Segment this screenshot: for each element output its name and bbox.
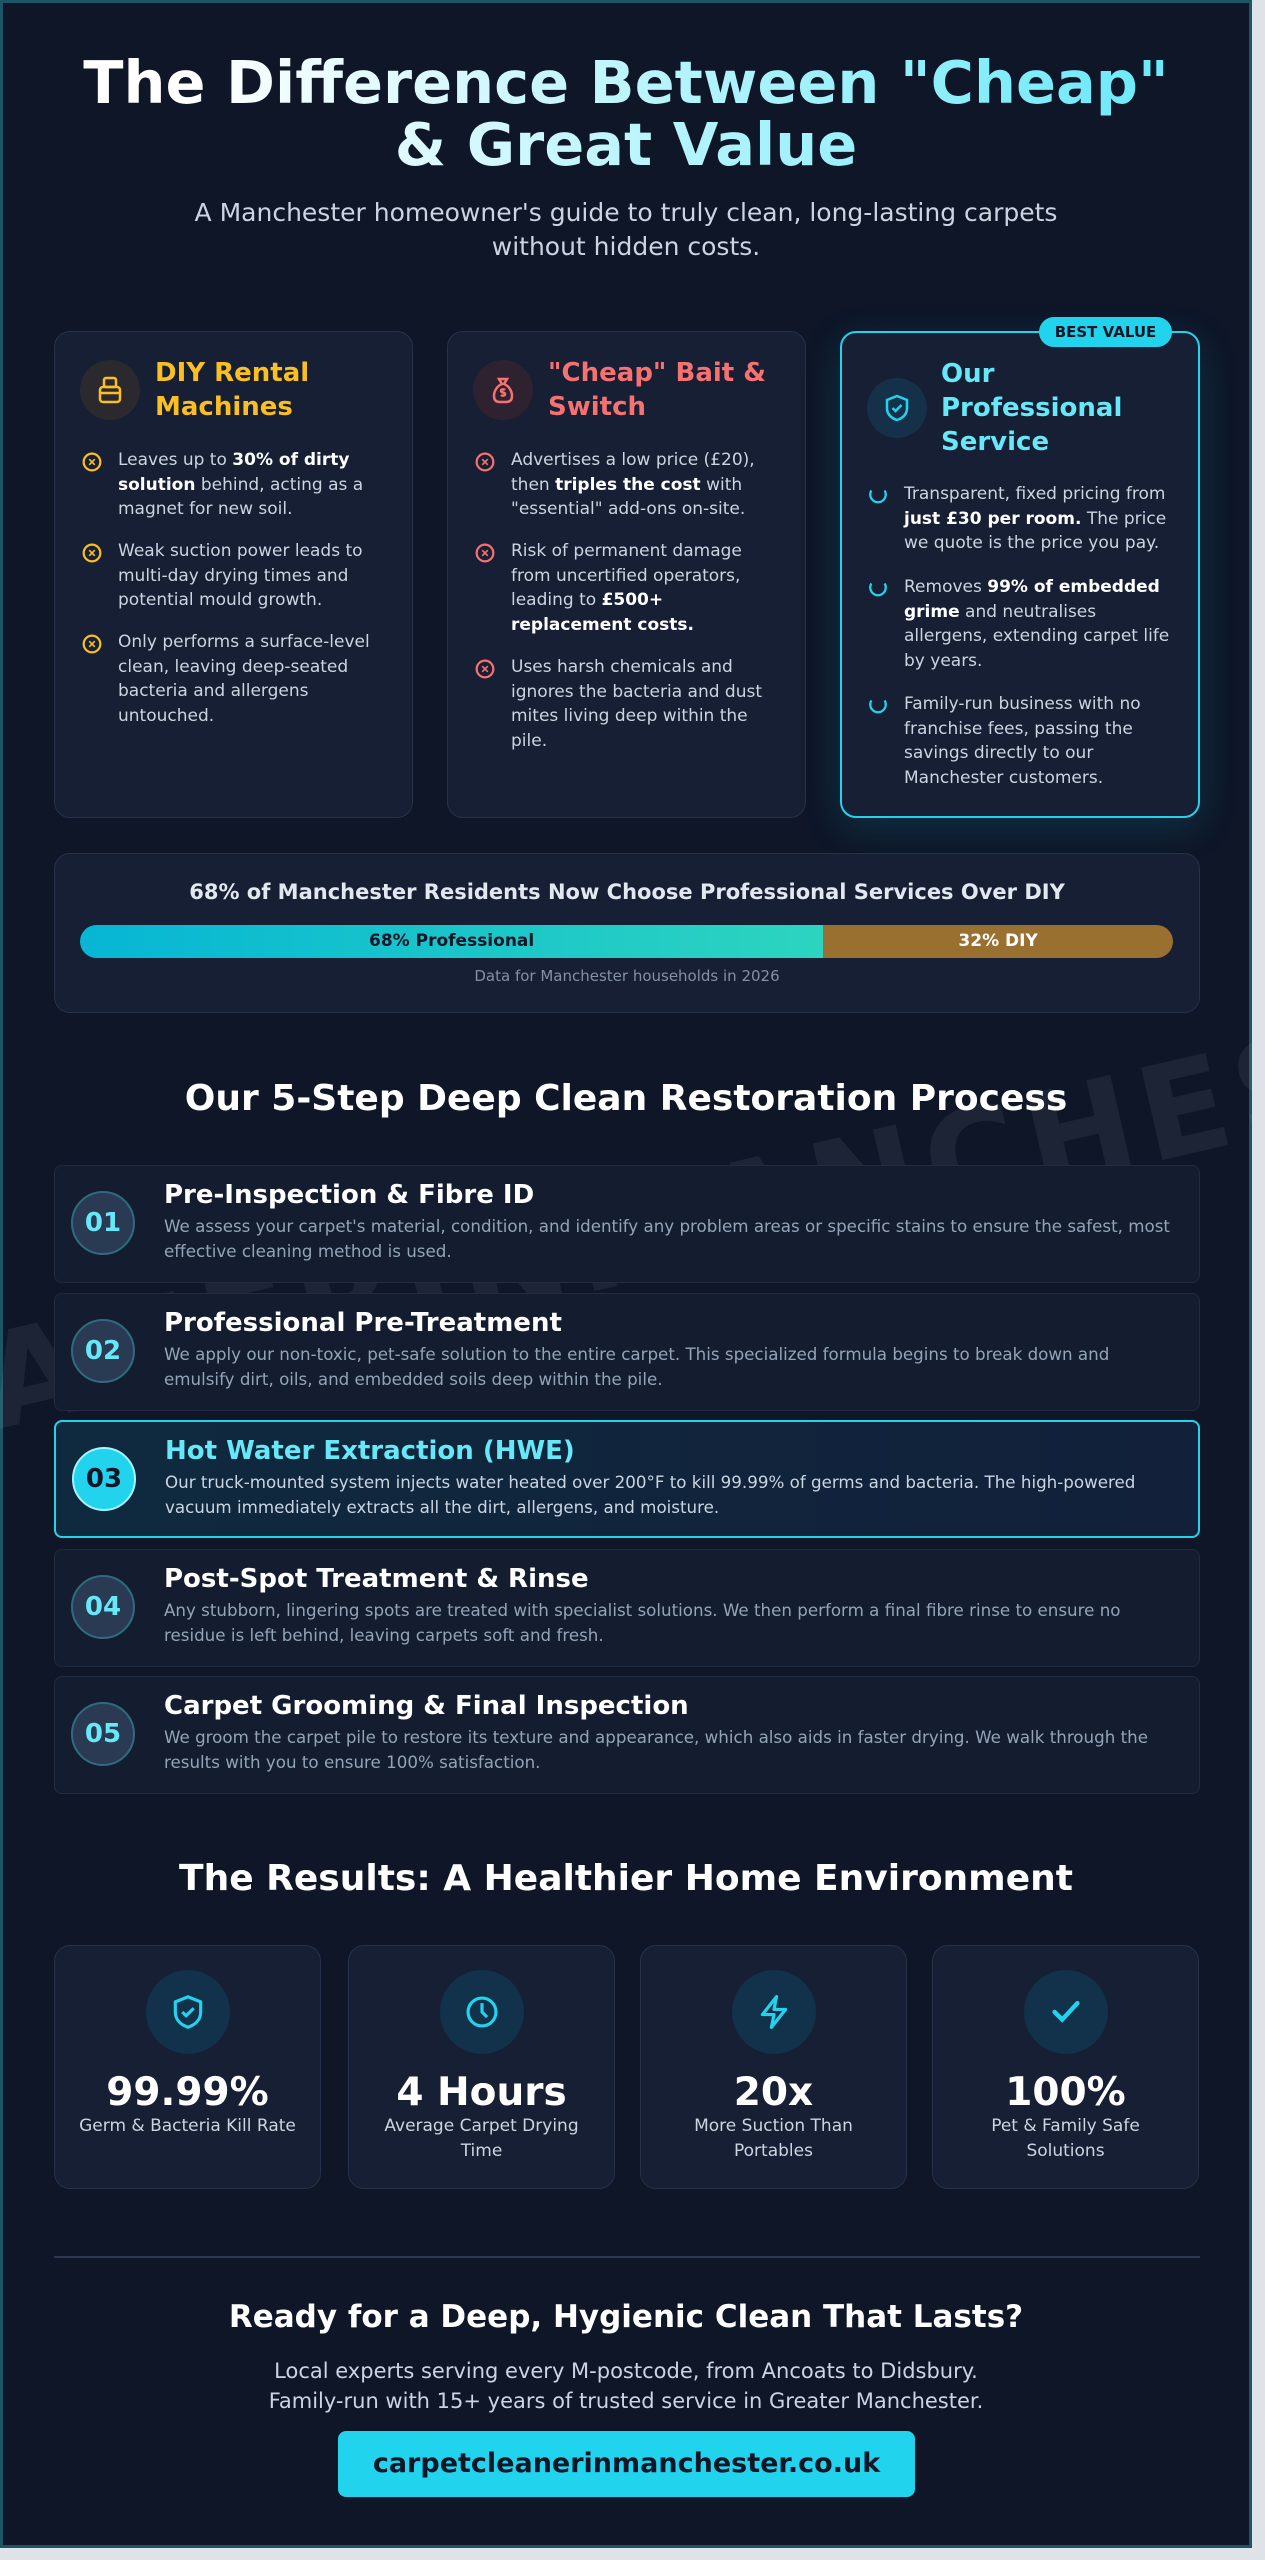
bullet list: Advertises a low price (£20), then triples the cost with "essential" add-ons on-site. (511, 450, 755, 519)
result: kill rate: Germ & Bacteria Kill Rate (79, 2116, 296, 2136)
stat heading: 68% of Manchester Residents Now Choose Professional Services Over DIY (189, 880, 1065, 904)
step 05 (54, 1676, 1200, 1794)
CTA button (338, 2431, 915, 2497)
result: drying time: Average Carpet Drying Time (384, 2116, 579, 2161)
bar chart (80, 925, 1173, 958)
step 02 (54, 1293, 1200, 1411)
panel: stats bar (54, 853, 1200, 1013)
subtitle: A Manchester homeowner's guide to truly clean, long-lasting carpets (195, 198, 1057, 227)
result: safe: 100% (1005, 2070, 1126, 2115)
result: kill rate (54, 1945, 321, 2189)
step 05: We groom the carpet pile to restore its texture and appearance, which also aids in faster drying. We walk through the results with you to ensure 100% satisfaction. (164, 1727, 1148, 1772)
step 01: 01 (85, 1208, 121, 1238)
CTA text (269, 2359, 983, 2413)
heading: Switch (548, 392, 646, 422)
step 02: 02 (85, 1336, 121, 1366)
badge: best value (1039, 317, 1172, 347)
step 04: Post-Spot Treatment & Rinse (164, 1564, 589, 1594)
heading (548, 358, 766, 422)
step 01: We assess your carpet's material, condition, and identify any problem areas or specific stains to ensure the safest, most effective cleaning method is used. (164, 1216, 1170, 1261)
title (0, 52, 1252, 176)
icon: shield (867, 378, 927, 438)
heading: Machines (155, 392, 293, 422)
CTA text: Local experts serving every M-postcode, from Ancoats to Didsbury. (274, 2359, 978, 2383)
heading: "Cheap" Bait & (548, 358, 766, 388)
step 04: residue is left behind, leaving carpets soft and fresh. (164, 1625, 604, 1645)
subtitle (194, 198, 1057, 261)
title: & Great Value (395, 110, 857, 179)
CTA button: carpetcleanerinmanchester.co.uk (373, 2448, 880, 2479)
result: suction (640, 1945, 907, 2189)
panel: our professional service: Family-run business with no franchise fees, passing the savings directly to our Manchester customers. (904, 694, 1141, 788)
result: suction: 20x (734, 2070, 813, 2115)
caption: Data for Manchester households in 2026 (474, 967, 780, 985)
icon: money bag (473, 360, 533, 420)
result: safe: Pet & Family Safe Solutions (991, 2116, 1140, 2161)
step 04 (54, 1549, 1200, 1667)
step 05: 05 (85, 1719, 121, 1749)
section heading: process: Our 5-Step Deep Clean Restoration Process (185, 1078, 1067, 1119)
panel: DIY rental machines (54, 331, 413, 818)
result: drying time (348, 1945, 615, 2189)
heading (155, 358, 309, 422)
panel: cheap bait and switch (447, 331, 806, 818)
CTA text: Family-run with 15+ years of trusted service in Greater Manchester. (269, 2389, 983, 2413)
panel: DIY rental machines: Weak suction power leads to multi-day drying times and potential mould growth. (118, 541, 363, 610)
heading (941, 359, 1122, 457)
result: safe (932, 1945, 1199, 2189)
bar chart: 68% Professional (369, 931, 534, 951)
subtitle: without hidden costs. (492, 232, 760, 261)
result: drying time: 4 Hours (396, 2070, 567, 2115)
step 05: Carpet Grooming & Final Inspection (164, 1691, 689, 1721)
result: suction: More Suction Than Portables (694, 2116, 853, 2161)
step 01 (54, 1165, 1200, 1283)
heading: Service (941, 427, 1049, 457)
step 03 highlighted (54, 1420, 1200, 1538)
step 02: Professional Pre-Treatment (164, 1308, 562, 1338)
panel: cheap bait and switch: Uses harsh chemicals and ignores the bacteria and dust mites living deep within the pile. (511, 657, 762, 750)
heading: Our (941, 359, 994, 389)
panel: our professional service: Removes 99% of embedded grime and neutralises allergens, extending carpet life by years. (904, 577, 1169, 670)
step 03 highlighted: Our truck-mounted system injects water heated over 200°F to kill 99.99% of germs and bacteria. The high-powered vacuum immediately extracts all the dirt, allergens, and moisture. (165, 1472, 1135, 1517)
bullet list: Transparent, fixed pricing from just £30 per room. The price we quote is the price you pay. (904, 484, 1166, 553)
step 04: Any stubborn, lingering spots are treated with specialist solutions. We then perform a final fibre rinse to ensure no (164, 1600, 1120, 1620)
step 01: Pre-Inspection & Fibre ID (164, 1180, 534, 1210)
bar chart: 32% DIY (958, 931, 1038, 951)
step 03 highlighted: Hot Water Extraction (HWE) (165, 1436, 575, 1466)
step 02: We apply our non-toxic, pet-safe solution to the entire carpet. This specialized formula begins to break down and (164, 1344, 1109, 1364)
panel: our professional service (840, 331, 1200, 818)
title: The Difference Between "Cheap" (83, 48, 1169, 117)
heading: DIY Rental (155, 358, 309, 388)
bullet list: Leaves up to 30% of dirty solution behind, acting as a magnet for new soil. (118, 450, 363, 519)
step 04: 04 (85, 1592, 121, 1622)
badge: best value: BEST VALUE (1055, 323, 1156, 341)
result: kill rate: 99.99% (106, 2070, 269, 2115)
section heading: results: The Results: A Healthier Home Environment (179, 1858, 1073, 1899)
step 03 highlighted: 03 (86, 1464, 122, 1494)
icon: machine (80, 360, 140, 420)
step 02: emulsify dirt, oils, and embedded soils deep within the pile. (164, 1369, 663, 1389)
panel: DIY rental machines: Only performs a surface-level clean, leaving deep-seated bacteria and allergens untouched. (118, 632, 370, 726)
heading: Professional (941, 393, 1122, 423)
panel: cheap bait and switch: Risk of permanent damage from uncertified operators, leading to £500+ replacement costs. (511, 541, 742, 634)
CTA heading: Ready for a Deep, Hygienic Clean That Lasts? (229, 2299, 1023, 2335)
